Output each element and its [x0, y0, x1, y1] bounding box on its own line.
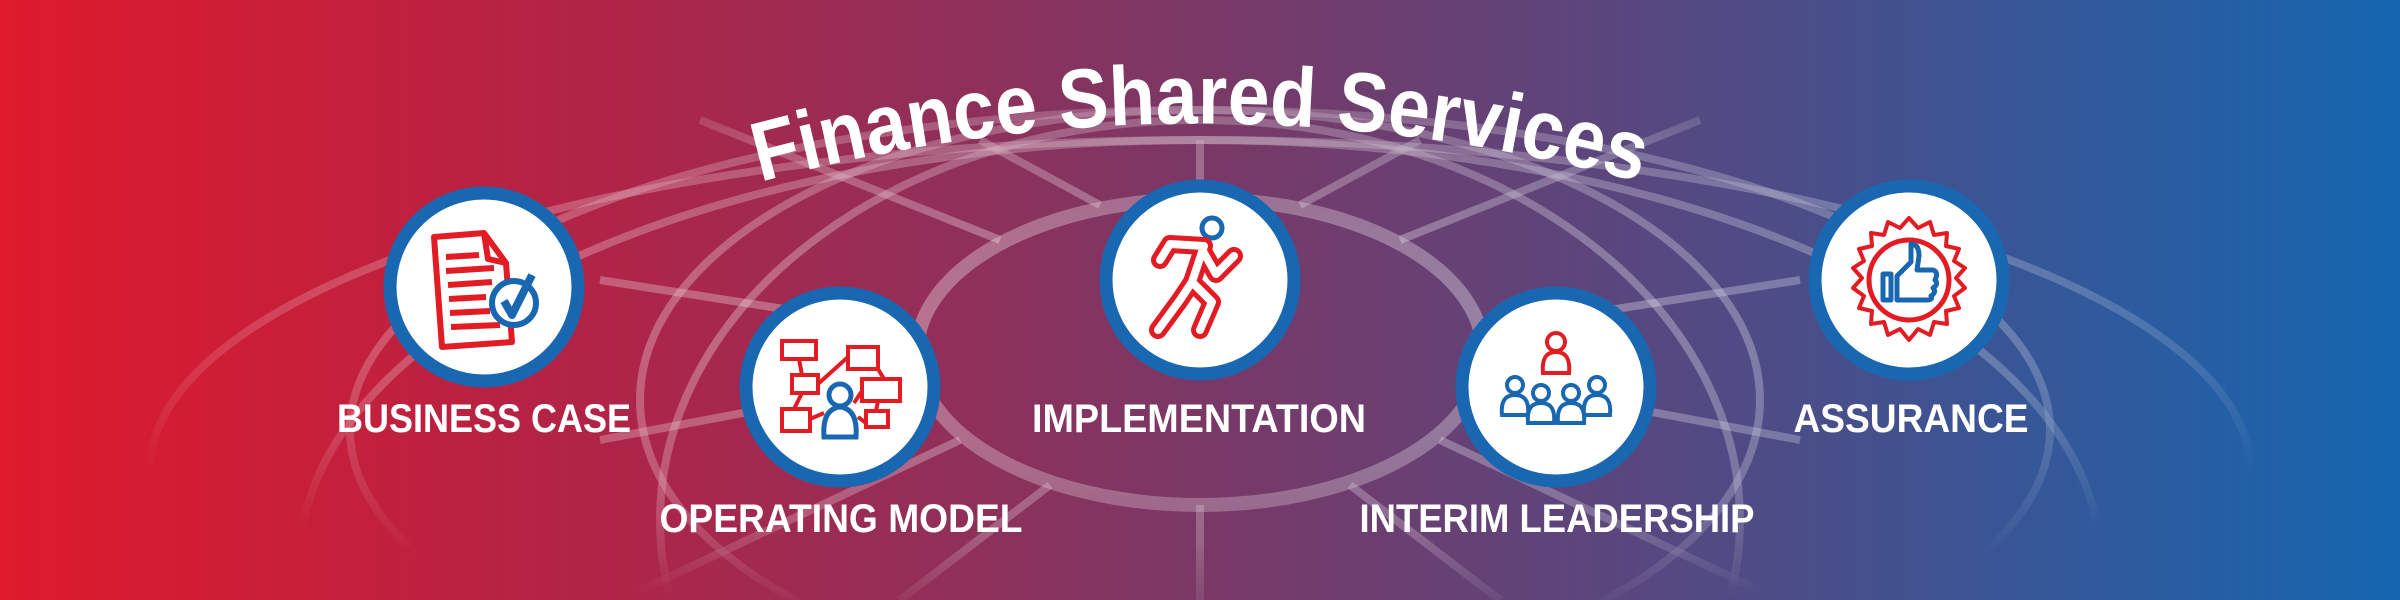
title: Finance Shared Services	[750, 64, 1644, 181]
panel: operating model	[746, 293, 934, 481]
icon: org chart	[782, 341, 900, 437]
icon: seal with thumbs up	[1853, 218, 1965, 340]
label: business case: BUSINESS CASE	[337, 397, 631, 441]
icon: team	[1502, 333, 1610, 423]
panel: implementation	[1106, 186, 1294, 374]
globe background	[150, 110, 2250, 600]
panel: interim leadership	[1462, 293, 1650, 481]
panel: business case	[390, 193, 578, 381]
icon: runner	[1158, 218, 1234, 330]
label: assurance: ASSURANCE	[1794, 397, 2028, 441]
label: implementation: IMPLEMENTATION	[1032, 397, 1366, 441]
panel: assurance	[1815, 186, 2003, 374]
label: interim leadership: INTERIM LEADERSHIP	[1360, 497, 1754, 541]
icon: document with check	[434, 233, 536, 347]
label: operating model: OPERATING MODEL	[660, 497, 1022, 541]
